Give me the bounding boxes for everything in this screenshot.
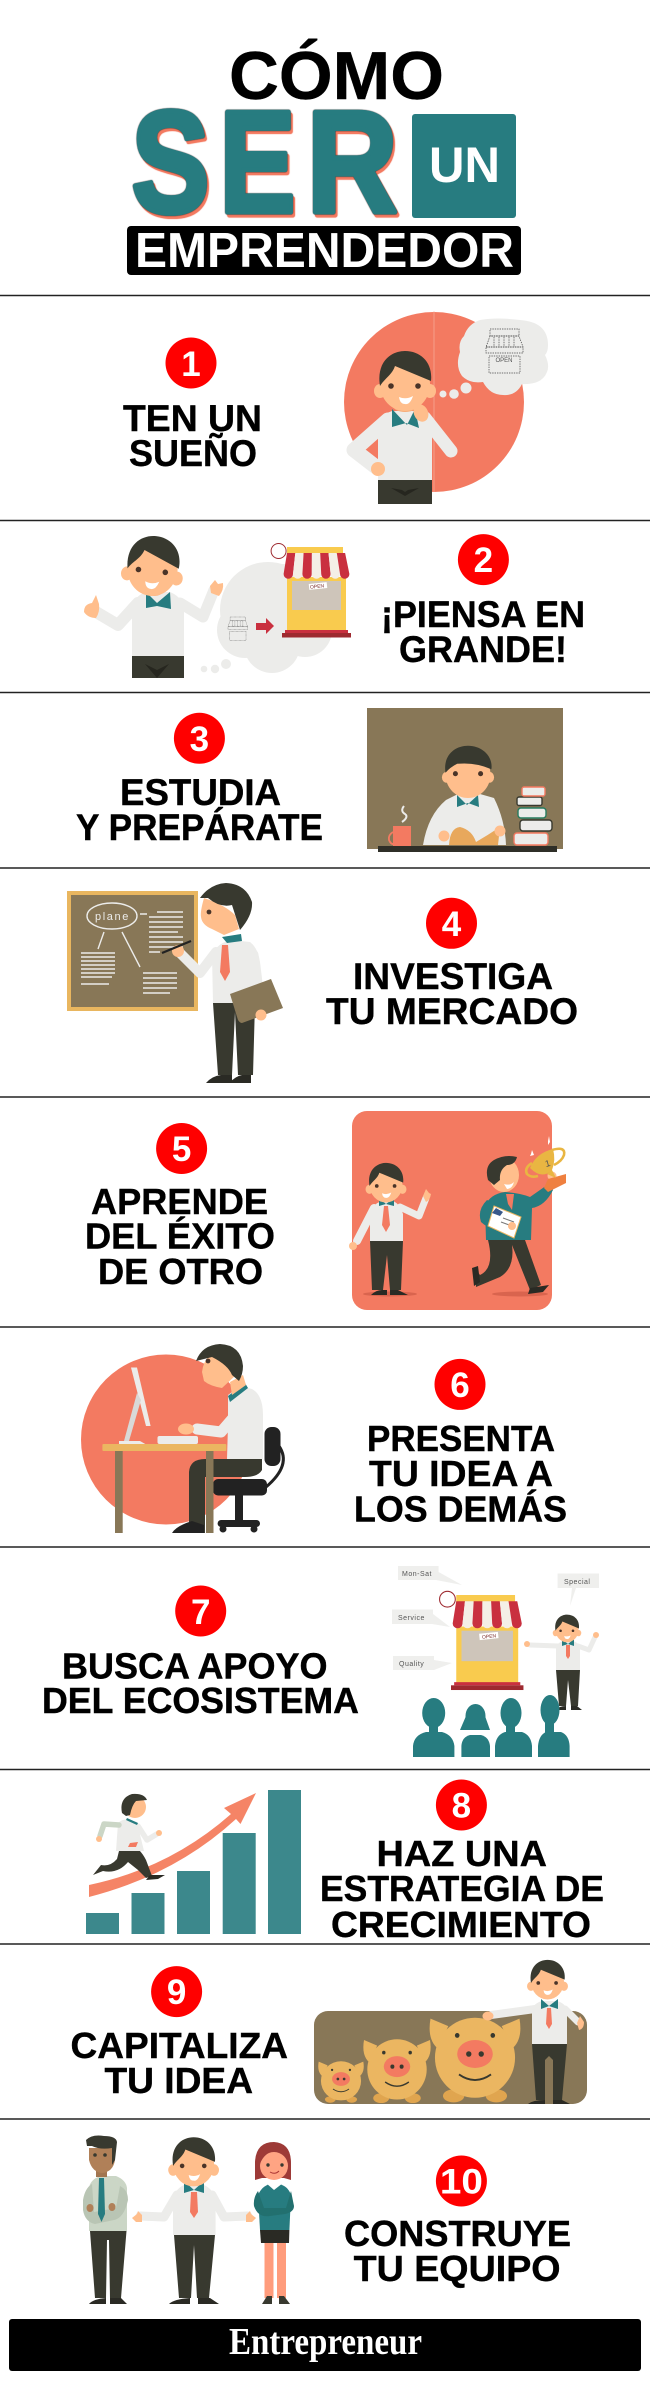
heading: capitaliza tu idea [70, 2025, 288, 2101]
icon: storefront with labelled features [392, 1566, 599, 1690]
panel: step 10 construye tu equipo [83, 2136, 571, 2304]
title word: SER with salmon shadow: R [307, 81, 398, 243]
heading: construye tu equipo [344, 2213, 571, 2289]
heading: construye tu equipo: TU EQUIPO [354, 2248, 561, 2289]
title [127, 38, 521, 278]
heading: busca apoyo del ecosistema: BUSCA APOYO [62, 1646, 328, 1686]
number badge 8 [436, 1780, 487, 1830]
heading: aprende del éxito de otro [85, 1181, 275, 1292]
icon: team leader with open arms [132, 2137, 256, 2304]
icon: successful man with trophy [472, 1136, 566, 1296]
number badge 3: 3 [190, 720, 209, 759]
icon: man writing on the board [162, 883, 283, 1083]
number badge 2 [458, 534, 509, 585]
icon: storefront with labelled features: Special [564, 1579, 590, 1586]
icon: man giving a thumbs up [349, 1163, 431, 1296]
number badge 5 [156, 1123, 207, 1174]
heading: aprende del éxito de otro: DE OTRO [98, 1251, 263, 1292]
number badge 7 [175, 1586, 226, 1636]
panel: step 6 presenta tu idea [81, 1344, 567, 1533]
heading: piensa en grande [381, 594, 585, 670]
bar chart: growth bars [86, 1790, 301, 1934]
heading: presenta tu idea a los demás [354, 1418, 567, 1530]
icon: dreaming man with thought bubble [344, 311, 548, 504]
heading: busca apoyo del ecosistema: DEL ECOSISTEMA [42, 1680, 359, 1721]
heading: piensa en grande: GRANDE! [399, 629, 567, 670]
heading: presenta tu idea a los demás: PRESENTA [367, 1418, 555, 1459]
panel: step 1 ten un sueño [123, 311, 548, 504]
icon: plan chalkboard: plane [95, 911, 130, 923]
title word: SER with salmon shadow [132, 81, 398, 243]
number badge 9: 9 [167, 1973, 186, 2012]
heading: estudia y prepárate: ESTUDIA [120, 772, 281, 813]
icon: storefront with labelled features: Mon-Sat [402, 1571, 432, 1578]
heading: haz una estrategia de crecimiento [320, 1833, 604, 1945]
heading: ten un sueño: TEN UN [123, 398, 262, 439]
number badge 10: 10 [440, 2162, 483, 2202]
heading: aprende del éxito de otro: APRENDE [91, 1181, 268, 1222]
heading: capitaliza tu idea: TU IDEA [104, 2060, 253, 2101]
icon: storefront with labelled features: Quality [399, 1661, 424, 1668]
icon: dreaming man with thought bubble: OPEN [495, 358, 513, 364]
heading: aprende del éxito de otro: DEL ÉXITO [85, 1216, 275, 1256]
icon: thought cloud with storefront: OPEN [310, 583, 325, 591]
footer: Entrepreneur logo bar [9, 2319, 641, 2371]
panel: step 8 estrategia de crecimiento [86, 1780, 604, 1945]
icon: man presenting a thought [84, 533, 223, 678]
title line: CÓMO: CÓMO [229, 38, 444, 114]
arrow: growth arrow [89, 1793, 256, 1897]
number badge 1 [166, 338, 216, 388]
icon: presenter beside the store [524, 1615, 599, 1710]
UN badge [412, 114, 516, 218]
icon: man pointing at the piggy banks [482, 1960, 584, 2104]
heading: capitaliza tu idea: CAPITALIZA [70, 2025, 288, 2066]
heading: busca apoyo del ecosistema [42, 1646, 359, 1721]
icon: audience silhouettes [413, 1695, 570, 1757]
icon: student reading at a desk [367, 708, 563, 852]
number badge 6: 6 [450, 1366, 470, 1405]
heading: estudia y prepárate: Y PREPÁRATE [76, 807, 323, 848]
icon: thought cloud with storefront [201, 544, 351, 673]
icon: storefront with labelled features: OPEN [482, 1633, 497, 1641]
number badge 7: 7 [191, 1593, 210, 1632]
panel: step 5 aprende del éxito de otro [85, 1111, 566, 1310]
footer: Entrepreneur logo bar: Entrepreneur [229, 2321, 422, 2363]
icon: plan chalkboard [69, 893, 196, 1009]
number badge 4: 4 [442, 905, 462, 944]
panel: step 4 investiga tu mercado [69, 883, 578, 1083]
icon: storefront with labelled features: Service [398, 1615, 425, 1622]
title word: SER with salmon shadow: S [132, 81, 210, 243]
heading: haz una estrategia de crecimiento: CRECIMIENTO [331, 1904, 591, 1945]
number badge 5: 5 [172, 1130, 191, 1169]
EMPRENDEDOR banner: EMPRENDEDOR [135, 224, 514, 278]
title word: SER with salmon shadow: E [220, 81, 296, 243]
panel: step 9 capitaliza tu idea [70, 1960, 587, 2104]
panel: step 2 piensa en grande [84, 533, 585, 678]
icon: three piggy banks [318, 2018, 520, 2103]
panel: step 3 estudia y prepárate [76, 708, 563, 852]
heading: investiga tu mercado: TU MERCADO [326, 991, 578, 1032]
icon: salmon rounded panel [352, 1111, 552, 1310]
number badge 1: 1 [181, 345, 201, 384]
UN badge: UN [429, 137, 500, 193]
icon: team member woman [254, 2142, 294, 2304]
heading: estudia y prepárate [76, 772, 323, 848]
number badge 6 [434, 1359, 486, 1410]
heading: investiga tu mercado: INVESTIGA [353, 956, 553, 997]
heading: ten un sueño [123, 398, 262, 474]
heading: construye tu equipo: CONSTRUYE [344, 2213, 571, 2254]
number badge 9 [151, 1966, 202, 2017]
heading: piensa en grande: ¡PIENSA EN [381, 594, 585, 635]
icon: brown rounded panel [314, 2011, 587, 2104]
number badge 2: 2 [474, 541, 493, 580]
heading: haz una estrategia de crecimiento: ESTRATEGIA DE [320, 1868, 604, 1909]
heading: investiga tu mercado [326, 956, 578, 1032]
icon: successful man with trophy: 1 [544, 1158, 551, 1169]
icon: team member with crossed arms [83, 2136, 128, 2304]
panel: step 7 busca apoyo del ecosistema [42, 1566, 599, 1757]
heading: presenta tu idea a los demás: LOS DEMÁS [354, 1488, 567, 1530]
heading: ten un sueño: SUEÑO [129, 432, 257, 474]
icon: running man [93, 1794, 165, 1880]
number badge 4 [426, 898, 477, 949]
heading: presenta tu idea a los demás: TU IDEA A [369, 1453, 553, 1494]
number badge 8: 8 [452, 1786, 471, 1826]
number badge 10 [436, 2156, 487, 2206]
icon: man working at a desk [81, 1344, 283, 1533]
heading: haz una estrategia de crecimiento: HAZ UNA [376, 1833, 547, 1874]
number badge 3 [174, 713, 225, 764]
